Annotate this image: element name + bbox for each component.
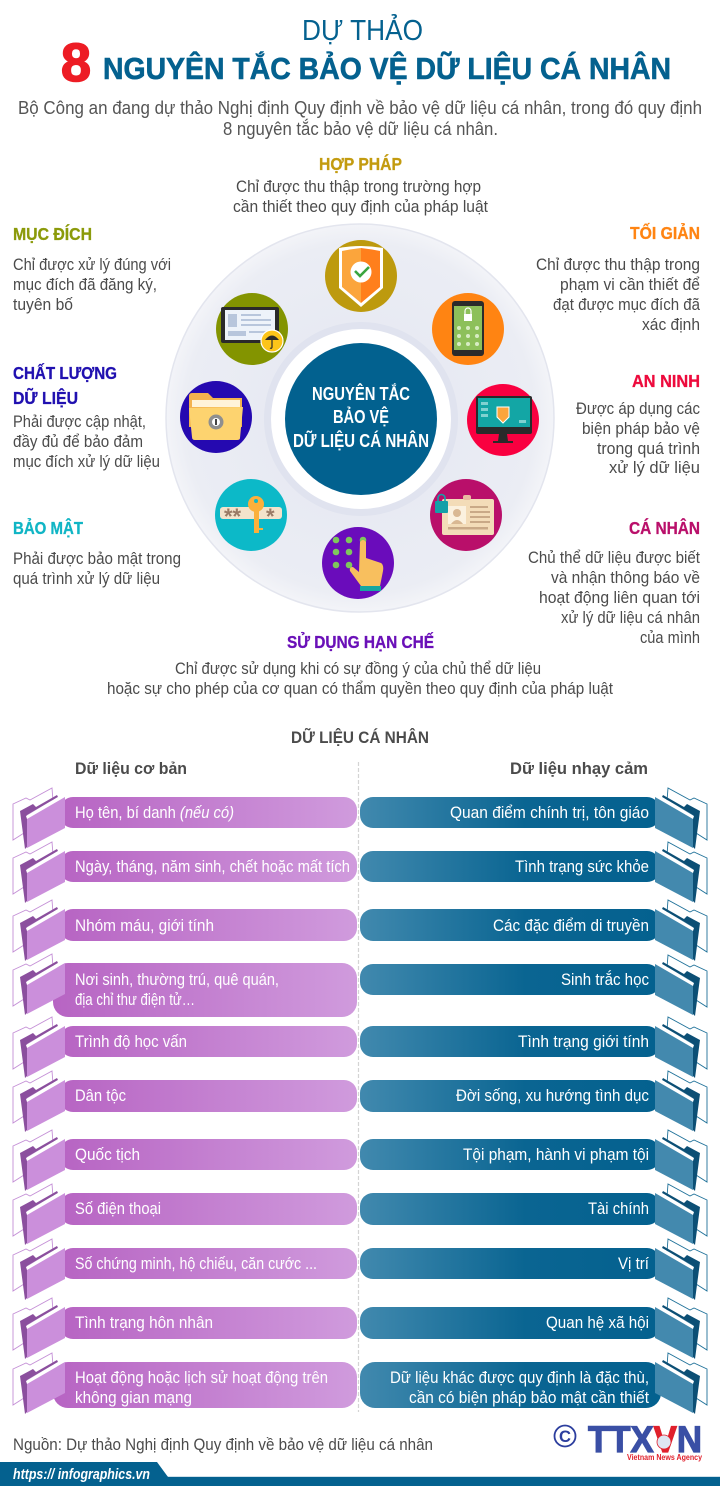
row: birth date: Ngày, tháng, năm sinh, chết hoặc mất tích: [75, 858, 350, 876]
principle: Hợp pháp: cần thiết theo quy định của pháp luật: [233, 198, 488, 216]
icon: key and password: **: [224, 504, 242, 529]
icon: key and password: *: [266, 504, 275, 529]
row: political views: [360, 788, 707, 849]
logo: copyright and TTXVN: TTXVN: [588, 1419, 702, 1460]
principle: Cá nhân: xử lý dữ liệu cá nhân: [561, 609, 700, 627]
row: location: [360, 1239, 707, 1300]
row: finance: Tài chính: [588, 1200, 649, 1218]
row: health: Tình trạng sức khỏe: [515, 858, 649, 876]
principle: Mục đích: MỤC ĐÍCH: [13, 223, 92, 244]
principle: Cá nhân: hoạt động liên quan tới: [539, 589, 700, 607]
principle: Chất lượng dữ liệu: đầy đủ để bảo đảm: [13, 433, 143, 451]
principle: An ninh: xử lý dữ liệu: [609, 459, 700, 477]
principle: Hợp pháp: HỢP PHÁP: [319, 153, 402, 174]
footer bar: https:// infographics.vn: [13, 1466, 150, 1483]
principle: Sử dụng hạn chế: Chỉ được sử dụng khi có sự đồng ý của chủ thể dữ liệu: [175, 660, 541, 678]
principle: An ninh: AN NINH: [632, 371, 700, 391]
principle: Mục đích: [13, 223, 171, 314]
title: draft line: DỰ THẢO: [302, 13, 423, 47]
principle: Cá nhân: và nhận thông báo về: [551, 569, 700, 587]
row: phone: Số điện thoại: [75, 1200, 161, 1218]
principle: Mục đích: Chỉ được xử lý đúng với: [13, 256, 171, 274]
principle: Chất lượng dữ liệu: mục đích xử lý dữ liệu: [13, 453, 160, 471]
icon: key and password: [215, 479, 287, 551]
principle: Tối giản: [536, 222, 701, 334]
principle: Tối giản: Chỉ được thu thập trong: [536, 256, 700, 274]
row: crime: Tội phạm, hành vi phạm tội: [463, 1146, 649, 1164]
row: biometrics: [360, 955, 707, 1016]
row: blood type: [13, 900, 357, 961]
outer disk: [166, 224, 554, 612]
row: gender status: Tình trạng giới tính: [518, 1033, 649, 1051]
column: sensitive data rows: [360, 788, 707, 1414]
row: crime: [360, 1130, 707, 1191]
principle: Bảo mật: Phải được bảo mật trong: [13, 550, 181, 568]
principle: Tối giản: phạm vi cần thiết để: [560, 276, 700, 294]
centre circle: [285, 343, 437, 495]
footer bar: [0, 1462, 720, 1486]
principle: Tối giản: đạt được mục đích đã: [553, 296, 701, 314]
icon: ID card with lock: [430, 479, 502, 551]
title: main heading: NGUYÊN TẮC BẢO VỆ DỮ LIỆU CÁ NHÂN: [103, 50, 671, 86]
icon: phone: [432, 293, 504, 365]
principle: Cá nhân: của mình: [640, 629, 700, 647]
icon: hand on keypad: [322, 527, 394, 599]
row: social relations: Quan hệ xã hội: [546, 1314, 649, 1332]
row: political views: Quan điểm chính trị, tôn giáo: [450, 804, 649, 822]
principle: Hợp pháp: [233, 153, 488, 216]
row: name: [13, 788, 357, 849]
icon: shield: [325, 240, 397, 312]
icon: tablet and umbrella: [216, 293, 288, 365]
row: online activity: [13, 1353, 357, 1414]
row: sexual life: [360, 1071, 707, 1132]
row: other data: Dữ liệu khác được quy định là đặc thù,: [390, 1369, 649, 1387]
principle: An ninh: trong quá trình: [597, 440, 700, 458]
principle: Chất lượng dữ liệu: Phải được cập nhật,: [13, 413, 146, 431]
row: gender status: [360, 1017, 707, 1078]
central disk diagram: [166, 224, 554, 612]
row: ethnicity: Dân tộc: [75, 1087, 126, 1105]
centre circle: BẢO VỆ: [333, 406, 389, 427]
logo: copyright and TTXVN: C: [559, 1427, 571, 1446]
row: location: Vị trí: [618, 1255, 649, 1273]
row: nationality: [13, 1130, 357, 1191]
principle: Sử dụng hạn chế: SỬ DỤNG HẠN CHẾ: [287, 631, 434, 652]
intro text: 8 nguyên tắc bảo vệ dữ liệu cá nhân.: [223, 118, 498, 139]
row: name: Họ tên, bí danh (nếu có): [75, 804, 234, 822]
row: online activity: không gian mạng: [75, 1389, 192, 1407]
row: address: Nơi sinh, thường trú, quê quán,: [75, 971, 279, 989]
principle: Bảo mật: [13, 517, 181, 588]
principle: Sử dụng hạn chế: [107, 631, 613, 698]
principle: Bảo mật: BẢO MẬT: [13, 517, 83, 538]
row: identity documents: [13, 1239, 357, 1300]
centre circle: NGUYÊN TẮC: [312, 383, 410, 404]
column heading: sensitive data: Dữ liệu nhạy cảm: [510, 760, 648, 778]
principle: Cá nhân: [528, 517, 700, 647]
intro text: [18, 97, 702, 139]
icon: monitor: [467, 384, 539, 456]
row: education: Trình độ học vấn: [75, 1033, 187, 1051]
inner ring and white band: [264, 322, 458, 516]
row: online activity: Hoạt động hoặc lịch sử hoạt động trên: [75, 1369, 328, 1387]
row: ethnicity: [13, 1071, 357, 1132]
principle: Cá nhân: Chủ thể dữ liệu được biết: [528, 549, 700, 567]
row: nationality: Quốc tịch: [75, 1146, 140, 1164]
section heading: DỮ LIỆU CÁ NHÂN: [291, 727, 429, 747]
row: birth date: [13, 842, 357, 903]
principle: An ninh: [576, 371, 700, 477]
row: other data: [360, 1353, 707, 1414]
principle: Mục đích: mục đích đã đăng ký,: [13, 276, 157, 294]
logo: copyright and TTXVN: Vietnam News Agency: [627, 1453, 702, 1462]
principle: An ninh: Được áp dụng các: [576, 400, 700, 418]
principle: Bảo mật: quá trình xử lý dữ liệu: [13, 570, 160, 588]
icon: locked folder: [180, 381, 252, 453]
source note: Nguồn: Dự thảo Nghị định Quy định về bảo vệ dữ liệu cá nhân: [13, 1436, 433, 1454]
row: genetics: [360, 900, 707, 961]
principle: Tối giản: TỐI GIẢN: [630, 222, 700, 243]
row: identity documents: Số chứng minh, hộ chiếu, căn cước ...: [75, 1255, 317, 1273]
row: education: [13, 1017, 357, 1078]
row: health: [360, 842, 707, 903]
row: biometrics: Sinh trắc học: [561, 970, 649, 989]
row: marital status: [13, 1298, 357, 1359]
row: address: [13, 954, 357, 1017]
principle: Hợp pháp: Chỉ được thu thập trong trường hợp: [236, 178, 481, 196]
row: finance: [360, 1184, 707, 1245]
centre circle: DỮ LIỆU CÁ NHÂN: [293, 430, 429, 451]
row: sexual life: Đời sống, xu hướng tình dục: [456, 1087, 649, 1105]
principle: Mục đích: tuyên bố: [13, 296, 73, 314]
row: phone: [13, 1184, 357, 1245]
principle: Sử dụng hạn chế: hoặc sự cho phép của cơ quan có thẩm quyền theo quy định của pháp luật: [107, 680, 613, 698]
row: other data: cần có biện pháp bảo mật cần thiết: [409, 1389, 649, 1407]
row: address: địa chỉ thư điện tử…: [75, 991, 195, 1009]
column heading: basic data: Dữ liệu cơ bản: [75, 760, 187, 778]
row: marital status: Tình trạng hôn nhân: [75, 1314, 213, 1332]
principle: An ninh: biện pháp bảo vệ: [582, 420, 700, 438]
principle: Tối giản: xác định: [642, 316, 700, 334]
row: blood type: Nhóm máu, giới tính: [75, 917, 214, 935]
principle: Chất lượng dữ liệu: CHẤT LƯỢNG: [13, 362, 117, 383]
row: genetics: Các đặc điểm di truyền: [493, 917, 649, 935]
principle: Cá nhân: CÁ NHÂN: [629, 517, 700, 538]
principle: Chất lượng dữ liệu: [13, 362, 160, 471]
column: basic data rows: [13, 788, 357, 1414]
title: big red number 8: 8: [61, 33, 91, 93]
principle: Chất lượng dữ liệu: DỮ LIỆU: [13, 387, 78, 408]
row: social relations: [360, 1298, 707, 1359]
